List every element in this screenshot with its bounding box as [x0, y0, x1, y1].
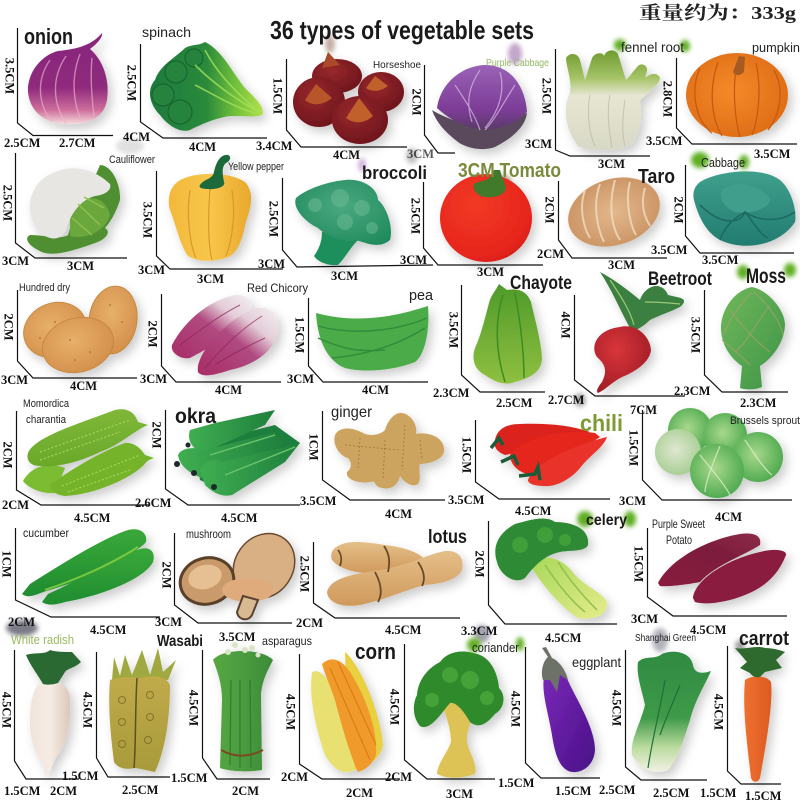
- dimensions: 2.5CM: [4, 136, 41, 150]
- panel: pea: [287, 287, 434, 397]
- panel: horseshoe: [270, 52, 434, 162]
- icon: coriander: [414, 651, 504, 778]
- axes: [156, 171, 283, 269]
- dimensions: 1.5CM: [626, 430, 640, 466]
- dimensions: 3.3CM: [461, 624, 498, 638]
- icon: brussels sprouts: [655, 408, 783, 498]
- icon: purple cabbage: [432, 65, 527, 149]
- icon: carrot: [735, 647, 785, 782]
- dimensions: 3CM: [287, 372, 314, 386]
- dimensions: [400, 198, 504, 279]
- dimensions: [62, 692, 159, 797]
- dimensions: 3CM: [400, 253, 427, 267]
- dimensions: 2.5CM: [653, 786, 690, 800]
- dimensions: 4CM: [715, 510, 742, 524]
- dimensions: 3CM: [258, 257, 285, 271]
- green tag blobs: [577, 511, 636, 527]
- dimensions: 2CM: [542, 196, 556, 224]
- dimensions: 2CM: [472, 550, 486, 578]
- label: momordica charantia: charantia: [26, 414, 67, 426]
- dimensions: 2.8CM: [660, 81, 674, 117]
- dimensions: 2.5CM: [408, 198, 422, 234]
- dimensions: [610, 690, 737, 800]
- axes: [574, 295, 685, 396]
- panel: ginger: [300, 404, 445, 521]
- dimensions: 4CM: [333, 148, 360, 162]
- axes: [462, 285, 545, 392]
- axes: [14, 650, 79, 779]
- dimensions: [433, 312, 533, 410]
- label: beetroot: Beetroot: [648, 269, 713, 290]
- dimensions: 3.5CM: [446, 312, 460, 348]
- dimensions: [631, 546, 727, 637]
- label: hundred dry: Hundred dry: [19, 282, 70, 294]
- dimensions: [258, 201, 358, 283]
- axes: [424, 182, 543, 265]
- dimensions: 3CM: [138, 263, 165, 277]
- panel: brussels sprout: [619, 408, 800, 524]
- axes: [322, 411, 445, 500]
- dimensions: 2.7CM: [548, 393, 585, 407]
- icon: eggplant: [542, 647, 595, 772]
- dimensions: 2.7CM: [59, 136, 96, 150]
- dimensions: 2CM: [50, 784, 77, 798]
- axes: [202, 650, 270, 779]
- dimensions: 4.5CM: [388, 689, 402, 725]
- dimensions: 4CM: [558, 311, 572, 339]
- icon: mushroom: [175, 522, 307, 619]
- panel: white radish: [0, 632, 81, 798]
- green tag blobs: [737, 263, 796, 279]
- panel: chayote: [433, 273, 572, 410]
- panel: celery: [461, 511, 636, 645]
- panel: coriander: [385, 637, 535, 800]
- dimensions: 3CM: [197, 272, 224, 286]
- axes: [424, 65, 455, 153]
- dimensions: 1.5CM: [270, 78, 284, 114]
- label: chayote: Chayote: [510, 273, 572, 294]
- dimensions: 3.5CM: [300, 494, 337, 508]
- icon: yellow pepper: [169, 155, 251, 261]
- panel: lotus: [296, 527, 467, 637]
- panel: momordica charantia: [0, 398, 154, 525]
- dimensions: 1CM: [306, 433, 320, 461]
- dimensions: [537, 196, 635, 272]
- panel: moss artichoke: [674, 263, 796, 410]
- dimensions: 2.5CM: [496, 396, 533, 410]
- icon: sweet potato: [658, 533, 786, 603]
- label: pumpkin: pumpkin: [752, 40, 800, 55]
- dimensions: 2.5CM: [266, 201, 280, 237]
- panel: beetroot: [548, 269, 713, 417]
- panel: red chicory: [140, 281, 308, 397]
- label: onion: onion: [24, 24, 73, 49]
- label: ginger: ginger: [331, 404, 373, 421]
- icon: chayote: [473, 284, 542, 384]
- panel: spinach: [123, 24, 293, 154]
- label: broccoli: broccoli: [362, 163, 427, 183]
- dimensions: 4.5CM: [284, 694, 298, 730]
- label: fennel root: fennel root: [621, 39, 684, 55]
- axes: [476, 420, 610, 499]
- panel: asparagus: [171, 634, 312, 798]
- panel: fennel root: [525, 39, 690, 171]
- icon: onion: [28, 33, 108, 124]
- dimensions: 3.5CM: [702, 253, 739, 267]
- axes: [166, 410, 300, 505]
- axes: [642, 410, 792, 500]
- label: shanghai green: Shanghai Green: [635, 633, 696, 644]
- dimensions: 4.5CM: [385, 623, 422, 637]
- label: purple sweet potato: Potato: [666, 533, 692, 547]
- icon: asparagus: [213, 642, 273, 771]
- axes: [704, 290, 788, 392]
- icon: white radish: [26, 650, 81, 775]
- dimensions: [270, 78, 434, 162]
- dimensions: 3.5CM: [448, 493, 485, 507]
- label: purple cabbage: Purple Cabbage: [486, 58, 549, 69]
- dimensions: [0, 550, 127, 637]
- icon: horseshoe: [293, 52, 404, 144]
- axes: [174, 533, 292, 623]
- blurred smudges near labels: [6, 35, 745, 652]
- icon: pea pods: [316, 306, 428, 370]
- dimensions: 1.5CM: [4, 784, 41, 798]
- dimensions: 3.5CM: [140, 202, 154, 238]
- dimensions: 4.5CM: [90, 623, 127, 637]
- panel: taro: [537, 166, 675, 272]
- dimensions: 2CM: [0, 441, 14, 469]
- label: lotus: lotus: [428, 527, 467, 548]
- axes: [18, 290, 137, 378]
- dimensions: [712, 694, 782, 800]
- label: purple sweet potato: [652, 517, 705, 547]
- dimensions: 3.4CM: [256, 139, 293, 153]
- label: cucumber: cucumber: [23, 526, 69, 540]
- dimensions: 2.5CM: [298, 556, 312, 592]
- label: yellow pepper: Yellow pepper: [228, 161, 284, 173]
- panel: corn: [281, 639, 400, 800]
- dimensions: 1.5CM: [700, 786, 737, 800]
- label: corn: corn: [355, 639, 396, 664]
- title: 36 types of vegetable sets: [270, 15, 534, 45]
- label: momordica charantia: [23, 398, 70, 426]
- icon: cucumber: [22, 529, 154, 605]
- dimensions: 2CM: [160, 561, 174, 589]
- dimensions: 3CM: [2, 254, 29, 268]
- panel: chili: [448, 410, 623, 518]
- icon: shanghai green: [632, 652, 711, 772]
- panel: cabbage: [651, 152, 795, 267]
- panel: cucumber: [0, 526, 160, 637]
- dimensions: [296, 556, 422, 637]
- dimensions: [1, 313, 97, 393]
- label: moss: Moss: [746, 265, 786, 288]
- dimensions: 1.5CM: [460, 437, 474, 473]
- icon: cabbage: [693, 171, 795, 246]
- icon: okra: [174, 410, 300, 496]
- icon: fennel root: [566, 50, 660, 150]
- dimensions: 4.5CM: [712, 694, 726, 730]
- dimensions: 3CM: [67, 259, 94, 273]
- dimensions: [651, 196, 739, 267]
- dimensions: 2CM: [296, 616, 323, 630]
- icon: ginger: [334, 413, 444, 488]
- label: eggplant: eggplant: [572, 654, 621, 670]
- dimensions: 4CM: [189, 140, 216, 154]
- panel: wasabi: [62, 633, 203, 797]
- axes: [314, 542, 460, 618]
- dimensions: 2CM: [537, 247, 564, 261]
- dimensions: 3.5CM: [688, 317, 702, 353]
- dimensions: 1.5CM: [498, 776, 535, 790]
- label: white radish: White radish: [11, 632, 74, 647]
- icon: chili: [491, 424, 607, 486]
- dimensions: [123, 65, 293, 154]
- panel: hundred dry: [1, 282, 141, 393]
- dimensions: 4.5CM: [221, 511, 258, 525]
- dimensions: 3.5CM: [646, 134, 683, 148]
- dimensions: 1.5CM: [632, 546, 646, 582]
- dimensions: [171, 690, 259, 798]
- icon: taro: [559, 166, 669, 258]
- dimensions: 2.5CM: [122, 783, 159, 797]
- panel: yellow pepper: [138, 155, 284, 286]
- dimensions: 4.5CM: [186, 690, 200, 726]
- dimensions: 3.5CM: [219, 630, 256, 644]
- axes: [488, 521, 617, 624]
- dimensions: 2CM: [2, 313, 16, 341]
- label: okra: okra: [175, 405, 216, 428]
- dimensions: [281, 694, 373, 800]
- label: coriander: coriander: [472, 640, 520, 655]
- dimensions: 3CM: [477, 265, 504, 279]
- axes: [526, 647, 600, 778]
- panel: onion: [2, 24, 113, 150]
- icon: broccoli: [295, 180, 391, 265]
- dimensions: [448, 437, 552, 518]
- panel: pumpkin: [646, 40, 800, 161]
- panel: broccoli: [258, 163, 433, 283]
- axes: [140, 44, 267, 138]
- dimensions: [155, 561, 256, 644]
- axes: [286, 59, 407, 147]
- dimensions: 4.5CM: [74, 511, 111, 525]
- icon: tomato: [440, 170, 532, 262]
- panel: purple cabbage: [410, 58, 549, 153]
- dimensions: 2CM: [150, 421, 164, 449]
- dimensions: [619, 430, 742, 524]
- panel: tomato: [400, 160, 561, 279]
- dimensions: 3.5CM: [651, 243, 688, 257]
- icon: lotus root: [327, 542, 463, 606]
- axes: [728, 646, 781, 784]
- icon: artichoke: [721, 287, 785, 389]
- dimensions: 4.5CM: [508, 691, 522, 727]
- dimensions: [0, 692, 77, 798]
- label: cabbage: Cabbage: [701, 155, 745, 170]
- dimensions: 2.3CM: [740, 396, 777, 410]
- axes: [300, 654, 400, 779]
- dimensions: [548, 311, 657, 417]
- dimensions: 3CM: [631, 612, 658, 626]
- dimensions: 3CM: [598, 157, 625, 171]
- dimensions: [300, 433, 412, 521]
- dimensions: 2.5CM: [599, 783, 636, 797]
- label: mushroom: mushroom: [186, 527, 231, 541]
- panel: carrot: [712, 628, 789, 800]
- panel: mushroom: [155, 522, 307, 644]
- label: purple sweet potato: Purple Sweet: [652, 517, 705, 531]
- dimensions: [138, 202, 224, 286]
- dimensions: 4CM: [70, 379, 97, 393]
- dimensions: 2CM: [410, 88, 424, 116]
- dimensions: [140, 320, 242, 397]
- dimensions: 1.5CM: [62, 769, 99, 783]
- dimensions: 2CM: [2, 498, 29, 512]
- dimensions: 3CM: [608, 258, 635, 272]
- dimensions: [135, 421, 258, 525]
- icon: hundred dry potatoes: [15, 283, 141, 380]
- green tag blobs: [691, 152, 749, 169]
- panel: okra: [135, 405, 300, 525]
- label: tomato: 3CM Tomato: [458, 160, 561, 182]
- dimensions: 2CM: [281, 770, 308, 784]
- axes: [16, 528, 160, 617]
- axes: [676, 58, 797, 144]
- dimensions: 4.5CM: [690, 623, 727, 637]
- dimensions: 2CM: [385, 770, 412, 784]
- label: wasabi: Wasabi: [157, 633, 203, 650]
- axes: [404, 644, 495, 779]
- axes: [626, 650, 707, 780]
- icon: corn: [311, 652, 383, 772]
- dimensions: 3CM: [525, 137, 552, 151]
- axes: [96, 652, 170, 777]
- dimensions: [674, 317, 777, 410]
- panel: shanghai green: [610, 633, 737, 800]
- axes: [648, 528, 787, 616]
- dimensions: 4CM: [123, 130, 150, 144]
- green tag blobs: [467, 637, 524, 652]
- dimensions: 4CM: [362, 383, 389, 397]
- dimensions: 2.3CM: [674, 384, 711, 398]
- label: chili: chili: [580, 410, 623, 436]
- dimensions: [525, 78, 625, 171]
- dimensions: [287, 317, 389, 397]
- dimensions: 2CM: [232, 784, 259, 798]
- icon: celery: [495, 518, 607, 619]
- panel: purple sweet potato: [631, 517, 787, 637]
- label: spinach: spinach: [142, 24, 191, 40]
- dimensions: 2.5CM: [0, 185, 14, 221]
- icon: bitter melon: [23, 409, 154, 496]
- dimensions: 3.5CM: [2, 58, 16, 94]
- label: celery: celery: [586, 512, 627, 529]
- icon: pumpkin: [686, 53, 788, 137]
- dimensions: 3CM: [407, 147, 434, 161]
- dimensions: 2.3CM: [433, 386, 470, 400]
- dimensions: 2.6CM: [135, 496, 172, 510]
- dimensions: [385, 689, 535, 800]
- icon: cauliflower: [27, 165, 120, 254]
- dimensions: 1.5CM: [555, 784, 592, 798]
- green tag blobs: [614, 39, 690, 52]
- dimensions: 3CM: [1, 373, 28, 387]
- dimensions: 2.5CM: [540, 78, 554, 114]
- label: carrot: carrot: [739, 628, 789, 650]
- dimensions: 4.5CM: [515, 504, 552, 518]
- dimensions: 4.5CM: [610, 690, 624, 726]
- label: horseshoe: Horseshoe: [373, 60, 421, 71]
- axes: [308, 298, 428, 382]
- dimensions: 4.5CM: [545, 631, 582, 645]
- label: taro: Taro: [638, 166, 675, 188]
- dimensions: [0, 185, 94, 273]
- label: asparagus: asparagus: [262, 634, 312, 648]
- dimensions: 3CM: [331, 269, 358, 283]
- axes: [18, 28, 113, 136]
- icon: red chicory: [172, 295, 278, 375]
- dimensions: 4CM: [385, 507, 412, 521]
- dimensions: 3CM: [155, 615, 182, 629]
- dimensions: 2CM: [146, 320, 160, 348]
- label: momordica charantia: Momordica: [23, 398, 70, 410]
- axes: [282, 178, 433, 267]
- dimensions: 3CM: [619, 494, 646, 508]
- dimensions: 2CM: [672, 196, 686, 224]
- label: cauliflower: Cauliflower: [109, 154, 155, 166]
- dimensions: 2CM: [346, 786, 373, 800]
- icon: wasabi: [109, 648, 176, 772]
- dimensions: 3.5CM: [754, 147, 791, 161]
- weight note: 重量约为：333g: [639, 3, 796, 23]
- dimensions: 7CM: [630, 403, 657, 417]
- icon: spinach: [150, 42, 263, 131]
- label: pea: pea: [409, 287, 434, 304]
- dimensions: [508, 691, 636, 798]
- dimensions: [0, 441, 111, 525]
- panel: eggplant: [508, 647, 636, 798]
- dimensions: 4.5CM: [80, 692, 94, 728]
- dimensions: [646, 81, 791, 161]
- axes: [558, 181, 667, 258]
- dimensions: [2, 58, 96, 150]
- dimensions: 1.5CM: [171, 771, 208, 785]
- axes: [16, 153, 127, 258]
- dimensions: [461, 550, 582, 645]
- dimensions: 4CM: [215, 383, 242, 397]
- panel: cauliflower: [0, 153, 155, 273]
- axes: [686, 165, 794, 253]
- axes: [556, 49, 650, 156]
- dimensions: 1.5CM: [292, 317, 306, 353]
- dimensions: 3CM: [140, 372, 167, 386]
- axes: [16, 411, 150, 505]
- axes: [162, 294, 281, 382]
- dimensions: 2CM: [8, 615, 35, 629]
- label: red chicory: Red Chicory: [247, 281, 308, 295]
- icon: beetroot: [594, 272, 684, 393]
- dimensions: 2.5CM: [124, 65, 138, 101]
